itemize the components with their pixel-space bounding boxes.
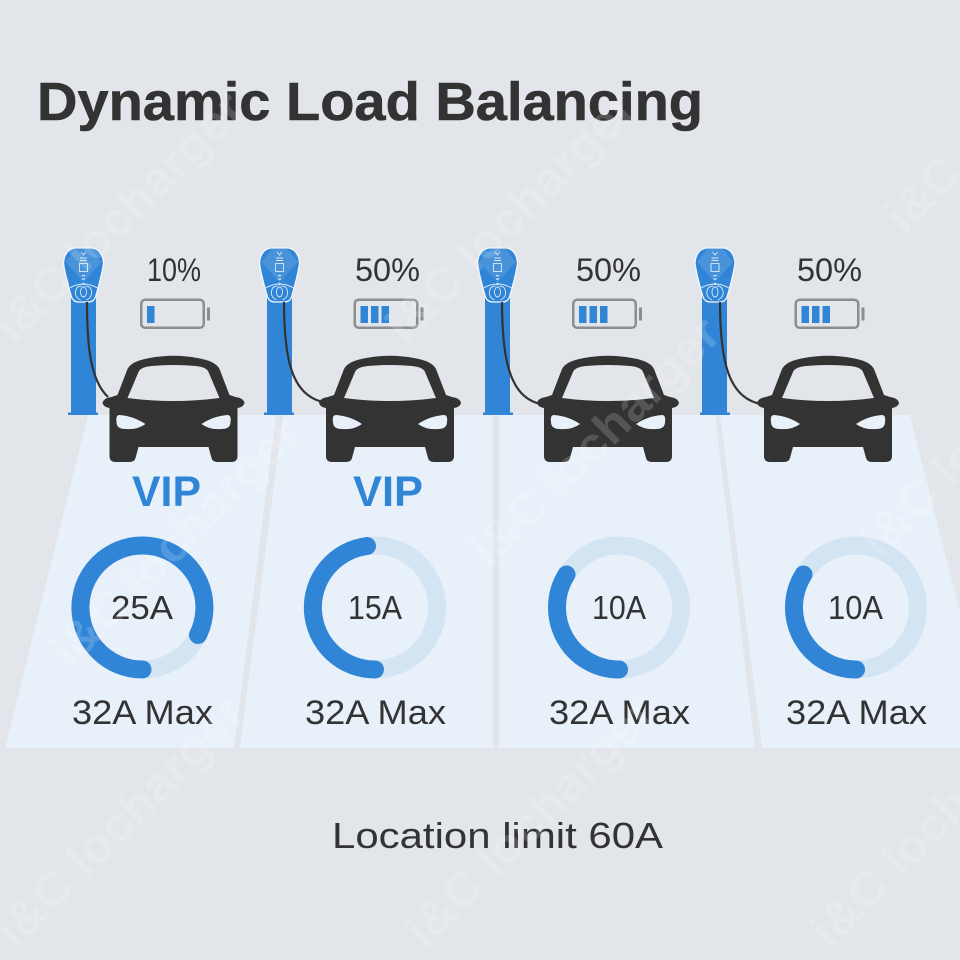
battery 2: 50%: 50% xyxy=(355,252,420,288)
battery 2: 50% xyxy=(355,252,424,328)
charging station 1 xyxy=(64,248,108,415)
VIP label 2: VIP xyxy=(353,468,423,516)
watermark: i&C locharger xyxy=(395,687,666,958)
gauge 2: 15A xyxy=(313,546,437,670)
gauge 3: 10A xyxy=(557,546,681,670)
car 1 xyxy=(102,356,244,462)
gauge 3: 10A: 10A xyxy=(592,589,646,626)
parking bay 3 xyxy=(499,415,755,748)
battery 3: 50%: 50% xyxy=(576,252,641,288)
battery 3: 50% xyxy=(573,252,642,328)
gauge 4: 10A xyxy=(794,546,918,670)
max label 1: 32A Max xyxy=(72,694,213,732)
watermark: i&C locharger xyxy=(40,407,311,678)
watermark: i&C locharger xyxy=(375,82,646,353)
gauge 2: 15A: 15A xyxy=(348,589,402,626)
parking bay 4 xyxy=(720,415,960,748)
charging station 4 xyxy=(695,248,761,415)
charging station 2 xyxy=(260,248,323,415)
VIP label 1: VIP xyxy=(132,468,201,516)
max label 4: 32A Max xyxy=(786,694,927,732)
gauge 1: 25A xyxy=(80,546,204,670)
battery 1: 10%: 10% xyxy=(147,252,201,288)
parking bay 1 xyxy=(5,415,276,748)
gauge 1: 25A: 25A xyxy=(111,589,173,626)
battery 1: 10% xyxy=(141,252,210,328)
battery 4: 50% xyxy=(796,252,864,328)
title: Dynamic Load Balancing xyxy=(37,72,703,132)
car 3 xyxy=(537,356,679,462)
car 2 xyxy=(319,356,461,462)
max label 3: 32A Max xyxy=(549,694,690,732)
parking bay 2 xyxy=(240,415,493,748)
car 4 xyxy=(757,356,899,462)
gauge 4: 10A: 10A xyxy=(828,589,883,626)
battery 4: 50%: 50% xyxy=(797,252,862,288)
watermark: i&C locharger xyxy=(460,307,731,578)
location limit caption: Location limit 60A xyxy=(332,815,663,856)
max label 2: 32A Max xyxy=(305,694,446,732)
charging station 3 xyxy=(478,248,541,415)
floor: parking bays xyxy=(5,415,960,748)
